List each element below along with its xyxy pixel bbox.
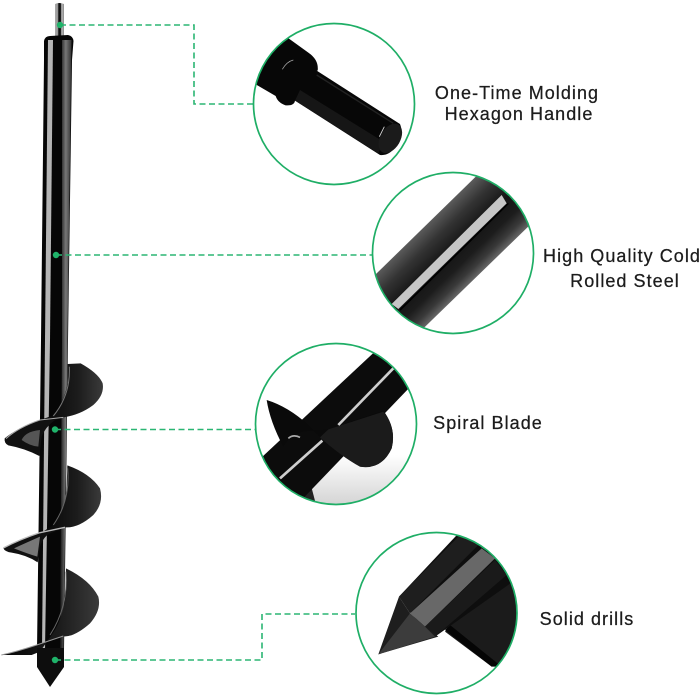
label: cold rolled steel: Rolled Steel <box>570 271 680 291</box>
callout line: solid drills <box>52 614 355 663</box>
dot: solid drills <box>52 657 58 663</box>
label: solid drills: Solid drills <box>540 609 634 629</box>
label: hexagon handle: Hexagon Handle <box>445 104 593 124</box>
green ring <box>356 532 517 694</box>
dot: hexagon handle <box>57 22 63 28</box>
panel: solid drill tip close-up <box>356 532 532 694</box>
floor shadow <box>312 465 404 504</box>
callout line: spiral blade <box>52 426 255 433</box>
green ring <box>372 172 534 334</box>
green ring <box>256 344 416 504</box>
label: hexagon handle <box>435 83 599 124</box>
handle photo <box>256 38 402 156</box>
label: hexagon handle: One-Time Molding <box>435 83 599 103</box>
long steel shaft <box>37 35 74 650</box>
drill tip photo <box>378 536 516 667</box>
pointed solid tip <box>37 648 64 687</box>
panel: cold rolled steel close-up <box>372 172 534 334</box>
panel: hexagon handle close-up <box>248 24 414 184</box>
dot: cold rolled steel <box>53 252 59 258</box>
hexagon pin on top of the shaft <box>55 3 64 36</box>
label: cold rolled steel <box>543 246 700 291</box>
label: cold rolled steel: High Quality Cold <box>543 246 700 266</box>
label: spiral blade: Spiral Blade <box>433 413 543 433</box>
auger drill bit <box>1 3 103 687</box>
panel: spiral blade close-up <box>252 344 418 510</box>
steel tube photo <box>376 176 528 328</box>
spiral blades <box>1 363 103 655</box>
dot: spiral blade <box>52 426 58 433</box>
blade photo <box>263 354 408 501</box>
callout line: cold rolled steel <box>53 252 372 258</box>
green ring <box>254 24 414 184</box>
callout line: hexagon handle <box>57 22 253 104</box>
